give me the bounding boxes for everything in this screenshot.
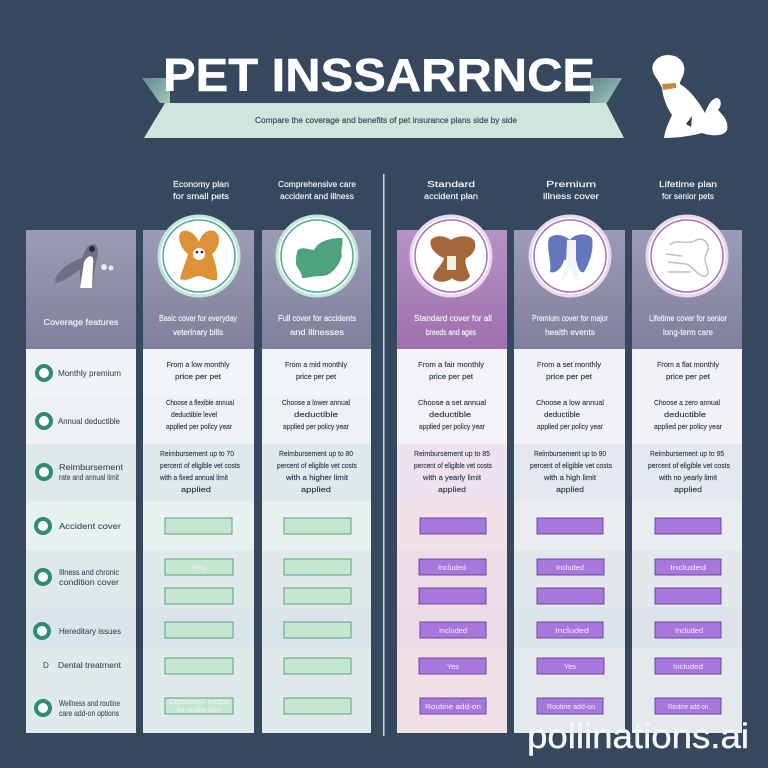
premium text: price per pet (546, 372, 593, 381)
plan name: and illnesses (290, 328, 344, 337)
deductible text: deductible level (171, 410, 217, 419)
title banner (142, 49, 624, 138)
plan name (159, 314, 237, 337)
premium text (418, 360, 484, 381)
premium text: From a fair monthly (418, 360, 484, 369)
bars: Routine add-on (425, 702, 481, 711)
deductible text: Choose a flexible annual (166, 398, 234, 407)
row label: wellness: care add-on options (59, 709, 119, 718)
subtitle: Compare the coverage and benefits of pet insurance plans side by side (255, 116, 518, 125)
panel: feature labels (26, 230, 136, 733)
row label: hereditary: Hereditary issues (59, 627, 121, 636)
deductible text: applied per policy year (283, 422, 349, 431)
reimbursement text: applied (556, 485, 584, 494)
bars: Routine add-on (668, 702, 708, 711)
bars: Included (556, 563, 584, 572)
plan name (532, 314, 608, 337)
reimbursement text: with a high limit (543, 473, 597, 482)
watermark: pollinations.ai (527, 717, 749, 756)
premium text: price per pet (429, 372, 474, 381)
row label: hereditary (35, 624, 121, 638)
bars: Included (438, 563, 466, 572)
reimbursement text: Reimbursement up to 80 (279, 449, 353, 458)
reimbursement text (277, 449, 357, 494)
bars: Routine add-on (547, 702, 595, 711)
row label: wellness: Wellness and routine (59, 699, 120, 708)
heading: plan 2 (278, 180, 357, 201)
panel: plan 1 (143, 216, 254, 733)
row label: accidents: Accident cover (59, 522, 121, 531)
ribbon body (144, 103, 624, 138)
column headings (173, 180, 717, 201)
bars (655, 518, 721, 714)
premium text: From a low monthly (166, 360, 230, 369)
bars (284, 518, 351, 714)
bars (419, 518, 486, 714)
deductible text: Choose a set annual (418, 398, 486, 407)
title: PET INSSARRNCE (163, 49, 595, 101)
bars: Included (439, 626, 467, 635)
deductible text (282, 398, 350, 431)
plan name (278, 314, 356, 337)
row label: deductible (37, 414, 121, 428)
premium text: From a mid monthly (285, 360, 347, 369)
deductible text: deductible (294, 410, 338, 419)
reimbursement text (648, 449, 730, 494)
heading: plan 5: Lifetime plan (659, 180, 717, 189)
icon: blue elephant (530, 216, 610, 296)
panel: plan 3 (397, 216, 507, 733)
bars: Optional extra (169, 697, 230, 706)
row label: deductible: Annual deductible (58, 417, 121, 426)
bars: Included (673, 662, 703, 671)
row label: accidents (36, 519, 121, 533)
divider (383, 174, 384, 736)
deductible text (418, 398, 486, 431)
icon: brown bear (411, 216, 491, 296)
reimbursement text: percent of eligible vet costs (160, 461, 240, 470)
heading: plan 3: accident plan (424, 192, 478, 201)
reimbursement text: applied (438, 485, 466, 494)
premium text (166, 360, 230, 381)
reimbursement text (159, 449, 240, 494)
heading: plan 1: Economy plan (173, 180, 229, 189)
row label: reimbursement: Reimbursement (59, 463, 124, 472)
premium text (285, 360, 347, 381)
reimbursement text: percent of eligible vet costs (648, 461, 730, 470)
plan name: Lifetime cover for senior (649, 314, 727, 323)
bars: for routine care (177, 705, 221, 714)
premium text: price per pet (296, 372, 337, 381)
premium text: From a set monthly (537, 360, 601, 369)
row label: premium (37, 366, 121, 380)
panel: plan 5 (632, 216, 742, 733)
heading: plan 4: illness cover (543, 192, 599, 201)
icon: grey pet (55, 244, 114, 288)
plan name: health events (545, 328, 595, 337)
deductible text: deductible (664, 410, 706, 419)
heading: plan 2: accident and illness (280, 192, 354, 201)
heading: plan 3 (424, 180, 478, 201)
ribbon left fold (142, 78, 170, 103)
deductible text: applied per policy year (654, 422, 722, 431)
row label: wellness (36, 699, 120, 718)
bars (165, 518, 233, 714)
row label: illness (36, 568, 119, 587)
deductible text: applied per policy year (537, 422, 603, 431)
plan name (414, 314, 492, 337)
deductible text: Choose a zero annual (654, 398, 720, 407)
plan name: Basic cover for everyday (159, 314, 237, 323)
row label: reimbursement: rate and annual limit (59, 473, 120, 482)
reimbursement text: Reimbursement up to 95 (650, 449, 724, 458)
premium text: From a flat monthly (657, 360, 719, 369)
heading: plan 3: Standard (427, 180, 475, 189)
bars: Yes (447, 662, 459, 671)
heading: plan 2: Comprehensive care (278, 180, 357, 189)
reimbursement text: Reimbursement up to 70 (160, 449, 234, 458)
bars: Included (675, 626, 703, 635)
bars: Yes (192, 563, 206, 572)
deductible text: applied per policy year (166, 422, 232, 431)
icon: green blob (277, 216, 357, 296)
icon: sitting white dog (652, 55, 727, 138)
deductible text (654, 398, 722, 431)
panel: plan 2 (262, 216, 371, 733)
icon: white outline pet (647, 216, 727, 296)
reimbursement text: with a fixed annual limit (159, 473, 229, 482)
reimbursement text: with no yearly limit (658, 473, 718, 482)
row label: illness: condition cover (59, 578, 119, 587)
heading: plan 5: for senior pets (662, 192, 714, 201)
panel: plan 4 (514, 216, 625, 733)
reimbursement text (530, 449, 612, 494)
heading: plan 4 (543, 180, 599, 201)
row label: illness: Illness and chronic (59, 568, 119, 577)
row label: dental: Dental treatment (58, 661, 122, 670)
deductible text (536, 398, 604, 431)
deductible text: Choose a lower annual (282, 398, 350, 407)
row label: reimbursement (37, 463, 124, 482)
plan name: long-term care (663, 328, 714, 337)
reimbursement text: applied (301, 485, 331, 494)
plan name: Standard cover for all (414, 314, 492, 323)
deductible text: deductible (544, 410, 580, 419)
plan name: breeds and ages (426, 328, 476, 337)
bars (537, 518, 604, 714)
heading: plan 4: Premium (546, 180, 597, 189)
plan name: Full cover for accidents (278, 314, 356, 323)
bars: Yes (564, 662, 576, 671)
reimbursement text: percent of eligible vet costs (277, 461, 357, 470)
row label: premium: Monthly premium (58, 369, 121, 378)
deductible text: deductible (429, 410, 471, 419)
reimbursement text: Reimbursement up to 85 (414, 449, 490, 458)
reimbursement text: applied (181, 485, 211, 494)
deductible text (166, 398, 234, 431)
deductible text: Choose a low annual (536, 398, 604, 407)
reimbursement text (414, 449, 492, 494)
premium text (657, 360, 719, 381)
heading: plan 1 (173, 180, 229, 201)
bars: Included (555, 626, 589, 635)
plan name: veterinary bills (173, 328, 223, 337)
ribbon right fold (590, 78, 622, 103)
reimbursement text: with a higher limit (285, 473, 349, 482)
premium text (537, 360, 601, 381)
plan name: Premium cover for major (532, 314, 608, 323)
reimbursement text: percent of eligible vet costs (530, 461, 612, 470)
deductible text: applied per policy year (419, 422, 485, 431)
premium text: price per pet (666, 372, 711, 381)
heading: plan 1: for small pets (173, 192, 229, 201)
reimbursement text: percent of eligible vet costs (414, 461, 492, 470)
plan name (649, 314, 727, 337)
icon: orange dog (159, 216, 239, 296)
row label: dental: D (43, 661, 49, 670)
reimbursement text: Reimbursement up to 90 (534, 449, 606, 458)
bars: Included (670, 563, 706, 572)
reimbursement text: with a yearly limit (422, 473, 482, 482)
reimbursement text: applied (674, 485, 702, 494)
premium text: price per pet (175, 372, 222, 381)
label: features: Coverage features (44, 318, 118, 327)
heading: plan 5 (659, 180, 717, 201)
